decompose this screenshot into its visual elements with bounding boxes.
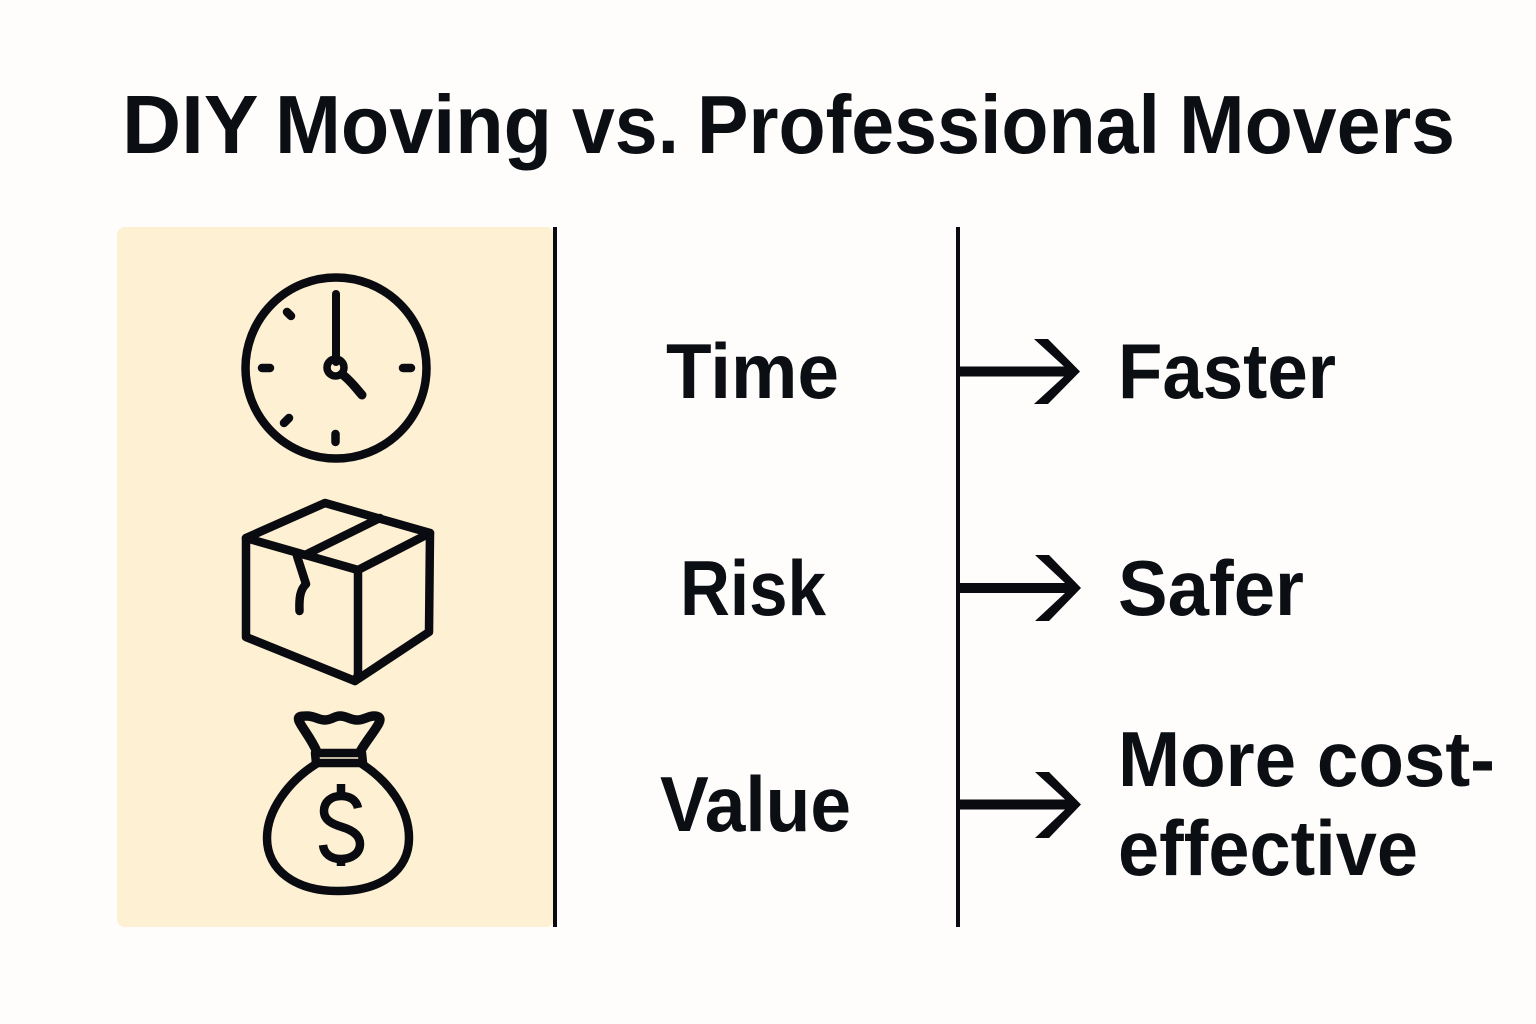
right divider — [956, 227, 960, 927]
result: Faster: Faster — [1118, 327, 1336, 415]
title: DIY — [122, 78, 258, 171]
panel: DIY icons — [117, 227, 554, 927]
result: Safer: Safer — [1118, 544, 1304, 632]
arrow: Value to More cost-effective — [960, 772, 1081, 838]
icon: clock — [246, 278, 426, 458]
icon: money bag — [267, 716, 409, 891]
result: More cost-effective: More cost- — [1118, 715, 1495, 803]
icon: damaged box — [246, 503, 430, 681]
label: Time: Time — [666, 327, 839, 415]
label: Value: Value — [660, 760, 851, 848]
title: Movers — [1179, 78, 1455, 171]
label: Risk: Risk — [680, 544, 827, 632]
result: More cost-effective: effective — [1118, 804, 1418, 892]
arrow: Risk to Safer — [960, 555, 1081, 621]
left divider — [553, 227, 557, 927]
title: Professional — [697, 78, 1160, 171]
title: vs. — [572, 78, 679, 171]
arrow: Time to Faster — [960, 339, 1080, 404]
title: Moving — [275, 78, 552, 171]
result: More cost-effective — [1118, 715, 1495, 892]
